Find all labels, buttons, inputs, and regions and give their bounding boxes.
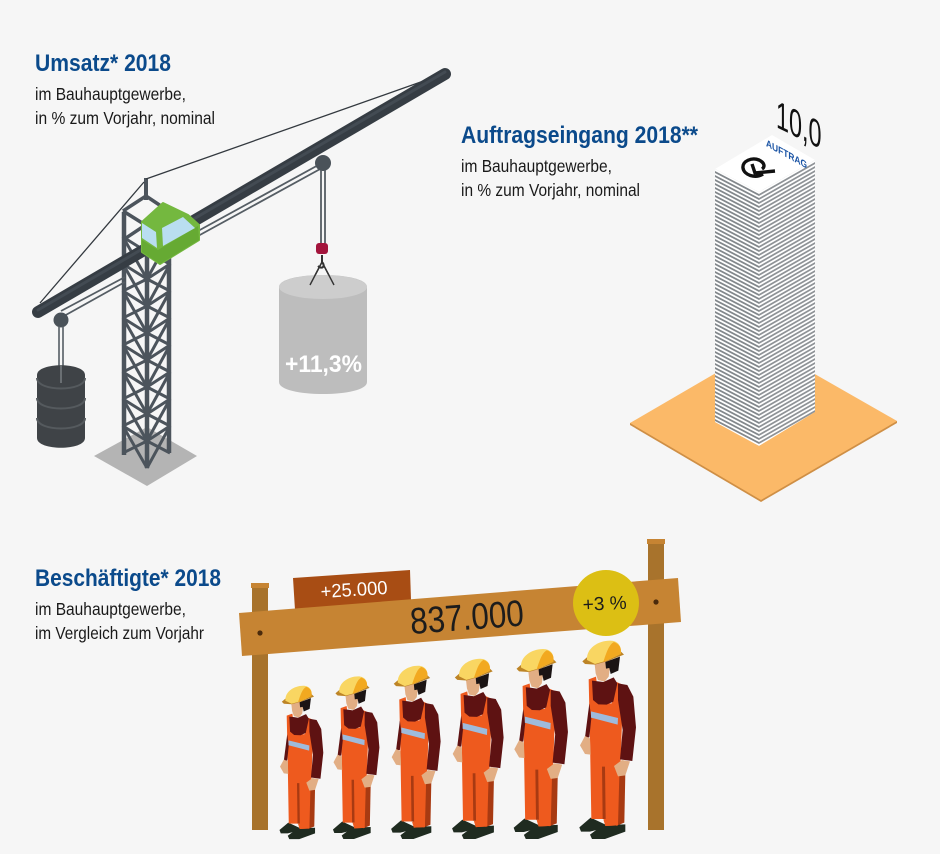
right pulley and hook <box>310 155 334 285</box>
subtext: Auftragseingang: im Bauhauptgewerbe, <box>461 156 612 176</box>
load: grey cylinder <box>279 262 367 394</box>
plank with total <box>239 578 681 656</box>
worker 6 <box>579 641 636 839</box>
value: 837.000: 837.000 <box>409 593 525 642</box>
crane cab <box>142 203 199 264</box>
paper stack top sheet <box>715 135 815 192</box>
value: +11,3%: +11,3% <box>285 351 362 378</box>
illustration: tower crane <box>37 72 445 486</box>
boom support struts <box>61 163 322 316</box>
right post <box>647 539 665 830</box>
section: Auftragseingang heading block <box>461 122 698 200</box>
subtext: Umsatz <box>35 84 215 128</box>
subtext: Auftragseingang: in % zum Vorjahr, nominal <box>461 180 640 200</box>
heading: Beschäftigte: Beschäftigte* 2018 <box>35 565 221 592</box>
crane cables <box>40 78 432 303</box>
subtext: Beschäftigte <box>35 599 204 643</box>
subtext: Umsatz: in % zum Vorjahr, nominal <box>35 108 215 128</box>
badge: +3 % <box>573 570 639 636</box>
left post <box>251 583 269 830</box>
subtext: Beschäftigte: im Vergleich zum Vorjahr <box>35 623 204 643</box>
paper stack side faces <box>715 160 815 446</box>
illustration: six workers of growing height <box>279 641 636 839</box>
logo on top sheet <box>743 159 775 176</box>
crane boom <box>38 72 445 312</box>
illustration: signboard <box>239 539 681 830</box>
subtext: Umsatz: im Bauhauptgewerbe, <box>35 84 186 104</box>
worker 3 <box>391 666 441 839</box>
left pulley and counterweight <box>37 312 85 448</box>
section: Beschäftigte heading block <box>35 565 221 643</box>
value: 10,0: 10,0 <box>776 93 822 159</box>
crane base plate <box>94 427 197 486</box>
subtext: Beschäftigte: im Bauhauptgewerbe, <box>35 599 186 619</box>
subtext: Auftragseingang <box>461 156 640 200</box>
flag: +25.000 <box>293 570 411 610</box>
illustration: order paper stack <box>630 93 897 502</box>
orange platform <box>630 345 897 502</box>
badge: +3 %: +3 % <box>582 593 627 616</box>
section: Umsatz heading block <box>35 50 215 128</box>
crane tower lattice <box>123 178 170 468</box>
heading: Auftragseingang: Auftragseingang 2018** <box>461 122 698 149</box>
worker 5 <box>514 649 568 839</box>
heading: Umsatz: Umsatz* 2018 <box>35 50 171 77</box>
worker 4 <box>452 659 504 839</box>
label: AUFTRAG: AUFTRAG <box>766 138 807 172</box>
worker 1 <box>279 686 323 839</box>
worker 2 <box>333 676 379 839</box>
flag: +25.000: +25.000 <box>320 578 388 603</box>
